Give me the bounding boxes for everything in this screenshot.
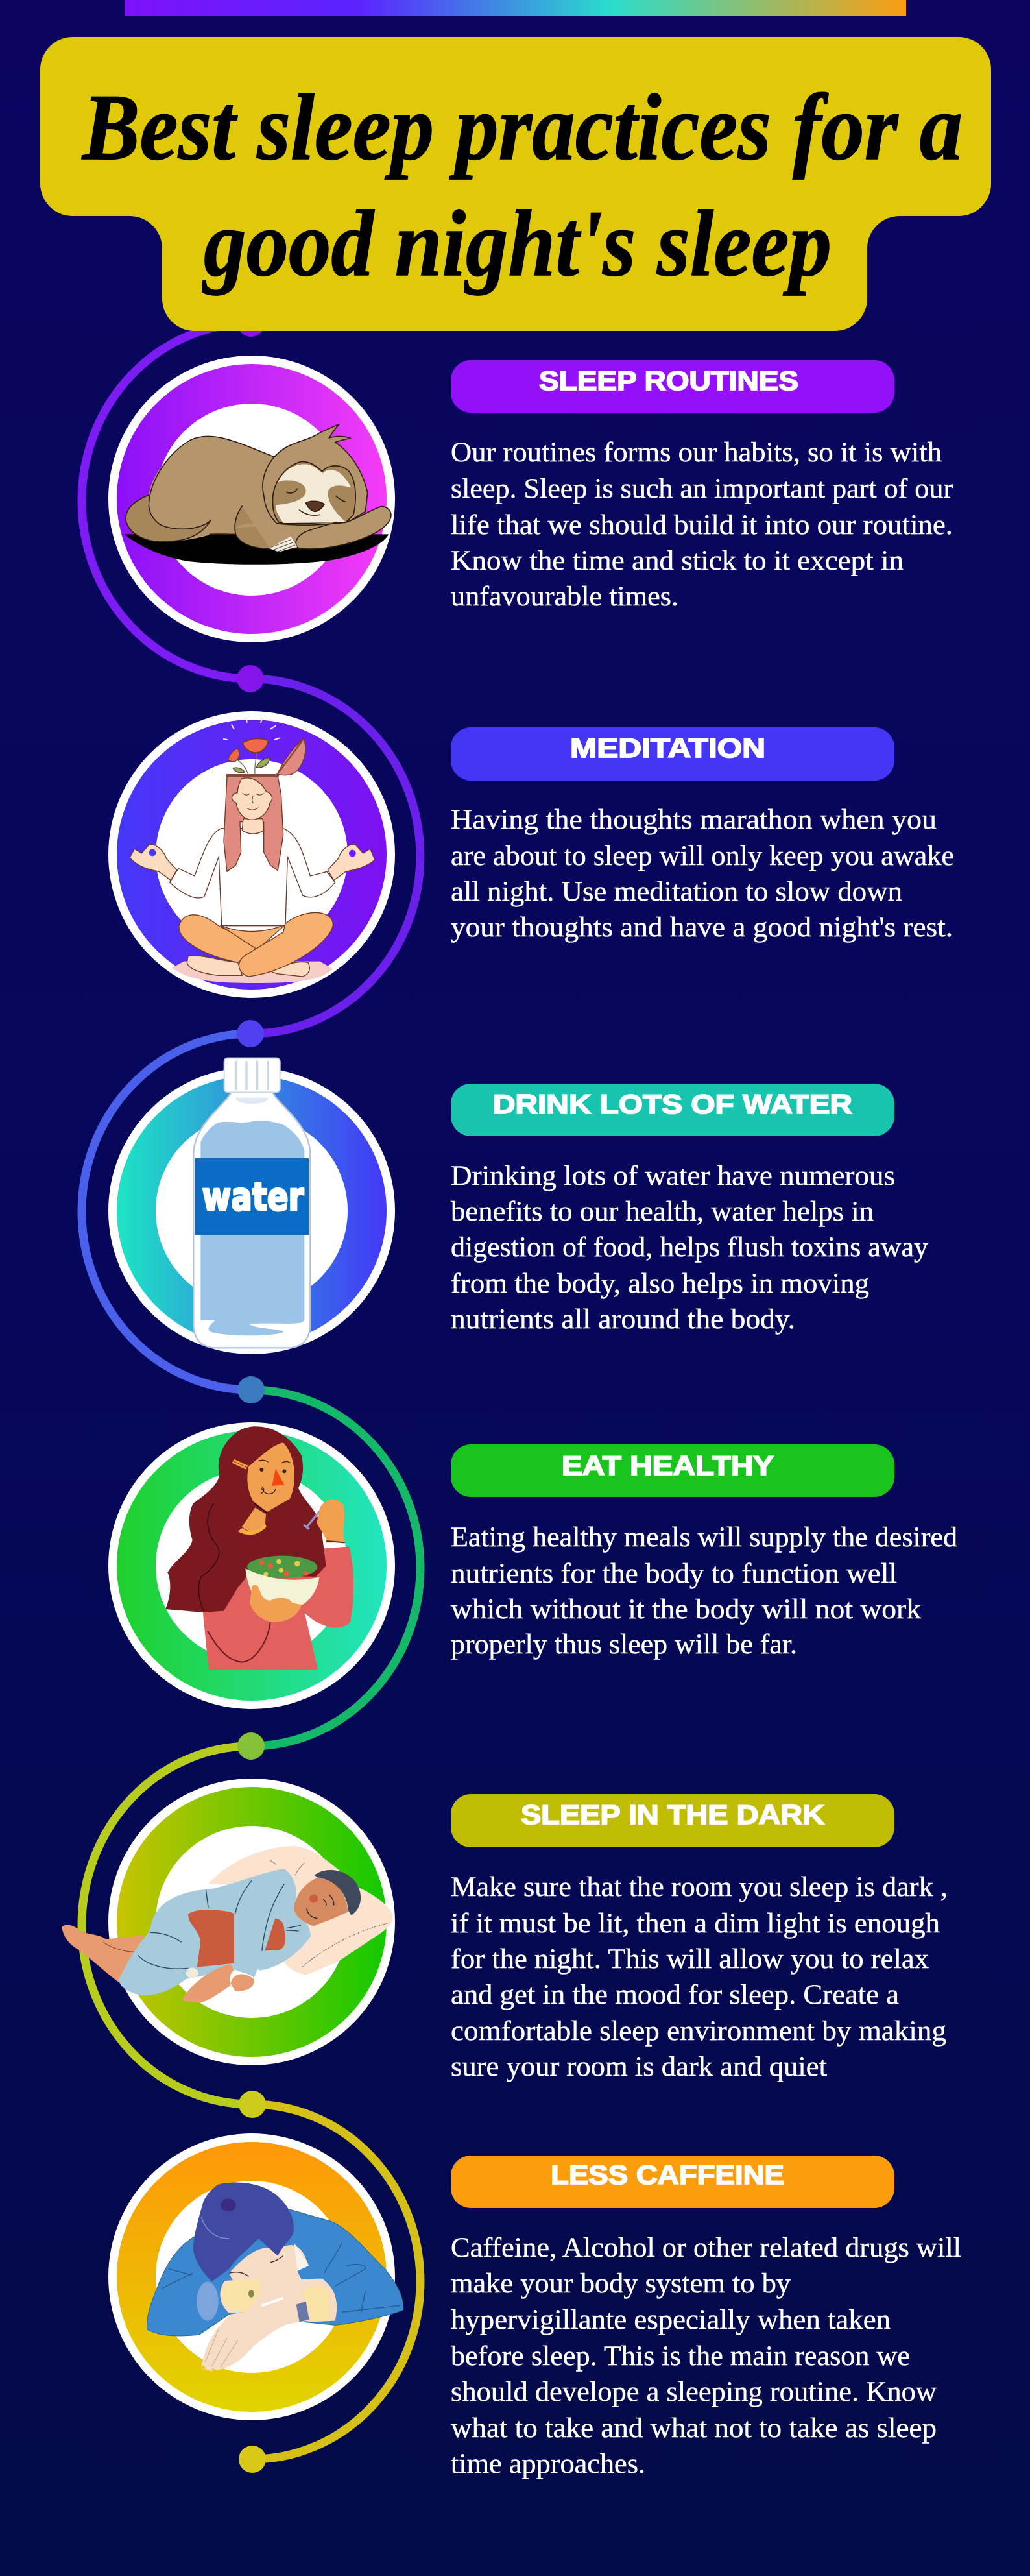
panel: drink lots of water: [108, 1058, 929, 1354]
description text: Our routines forms our habits, so it is with: [451, 437, 942, 468]
icon: person sleeping: [62, 1846, 393, 2003]
icon: water bottle: [193, 1058, 310, 1348]
description text: Eating healthy meals will supply the desired: [451, 1522, 957, 1553]
description text: [451, 1161, 929, 1335]
heading pill: [451, 1444, 894, 1497]
description text: if it must be lit, then a dim light is enough: [451, 1908, 940, 1939]
description text: unfavourable times.: [451, 581, 678, 612]
description text: benefits to our health, water helps in: [451, 1197, 874, 1227]
badge ring: [108, 356, 395, 642]
description text: digestion of food, helps flush toxins away: [451, 1232, 929, 1263]
description text: your thoughts and have a good night's rest.: [451, 912, 953, 943]
description text: from the body, also helps in moving: [451, 1269, 869, 1299]
heading pill: [451, 360, 894, 413]
description text: are about to sleep will only keep you awake: [451, 841, 954, 871]
title line 1: Best sleep practices for a: [81, 75, 963, 180]
heading pill: [451, 727, 894, 781]
panel: sleep in the dark: [62, 1779, 948, 2082]
description text: nutrients for the body to function well: [451, 1559, 897, 1589]
description text: [451, 1522, 957, 1660]
description text: life that we should build it into our routine.: [451, 510, 953, 541]
badge ring: [108, 1779, 395, 2065]
panel: meditation: [108, 711, 954, 998]
description text: Drinking lots of water have numerous: [451, 1161, 895, 1191]
panel: eat healthy: [108, 1422, 957, 1709]
description text: [451, 1872, 948, 2082]
icon: sleeping sloth: [125, 424, 391, 565]
heading pill: [451, 1794, 894, 1847]
heading pill: SLEEP IN THE DARK: [521, 1799, 824, 1830]
description text: and get in the mood for sleep. Create a: [451, 1980, 899, 2010]
description text: make your body system to by: [451, 2268, 791, 2299]
badge ring: [108, 1067, 395, 1354]
top gradient banner: [125, 0, 906, 16]
panel: less caffeine: [108, 2133, 961, 2479]
description text: what to take and what not to take as sleep: [451, 2413, 937, 2444]
description text: comfortable sleep environment by making: [451, 2016, 946, 2047]
heading pill: SLEEP ROUTINES: [539, 365, 798, 396]
badge ring: [108, 1422, 395, 1709]
description text: nutrients all around the body.: [451, 1304, 795, 1335]
description text: before sleep. This is the main reason we: [451, 2341, 910, 2372]
description text: all night. Use meditation to slow down: [451, 877, 902, 907]
label word: water: [202, 1174, 304, 1220]
heading pill: [451, 2156, 894, 2208]
description text: sure your room is dark and quiet: [451, 2052, 827, 2082]
description text: properly thus sleep will be far.: [451, 1629, 797, 1660]
icon: person asleep on arms: [147, 2183, 403, 2372]
description text: Make sure that the room you sleep is dark ,: [451, 1872, 948, 1902]
description text: Caffeine, Alcohol or other related drugs will: [451, 2233, 961, 2263]
panel: sleep routines: [108, 356, 953, 642]
description text: time approaches.: [451, 2449, 645, 2479]
badge ring: [108, 711, 395, 998]
description text: sleep. Sleep is such an important part of our: [451, 474, 953, 504]
description text: which without it the body will not work: [451, 1594, 922, 1625]
description text: hypervigillante especially when taken: [451, 2305, 891, 2335]
heading pill: MEDITATION: [570, 733, 765, 763]
heading pill: [451, 1084, 894, 1136]
description text: should develope a sleeping routine. Know: [451, 2377, 937, 2407]
heading pill: LESS CAFFEINE: [551, 2159, 784, 2190]
description text: Having the thoughts marathon when you: [451, 805, 937, 835]
description text: [451, 805, 954, 943]
title line 2: good night's sleep: [202, 191, 832, 296]
heading pill: EAT HEALTHY: [562, 1450, 774, 1481]
icon: meditating woman: [130, 719, 375, 983]
description text: for the night. This will allow you to relax: [451, 1944, 929, 1975]
heading pill: DRINK LOTS OF WATER: [493, 1089, 852, 1119]
description text: [451, 2233, 961, 2479]
icon: woman eating salad: [165, 1426, 353, 1670]
connector path: [82, 310, 420, 2473]
badge ring: [108, 2133, 395, 2420]
description text: [451, 437, 953, 612]
title panel: [40, 37, 991, 331]
description text: Know the time and stick to it except in: [451, 546, 904, 576]
